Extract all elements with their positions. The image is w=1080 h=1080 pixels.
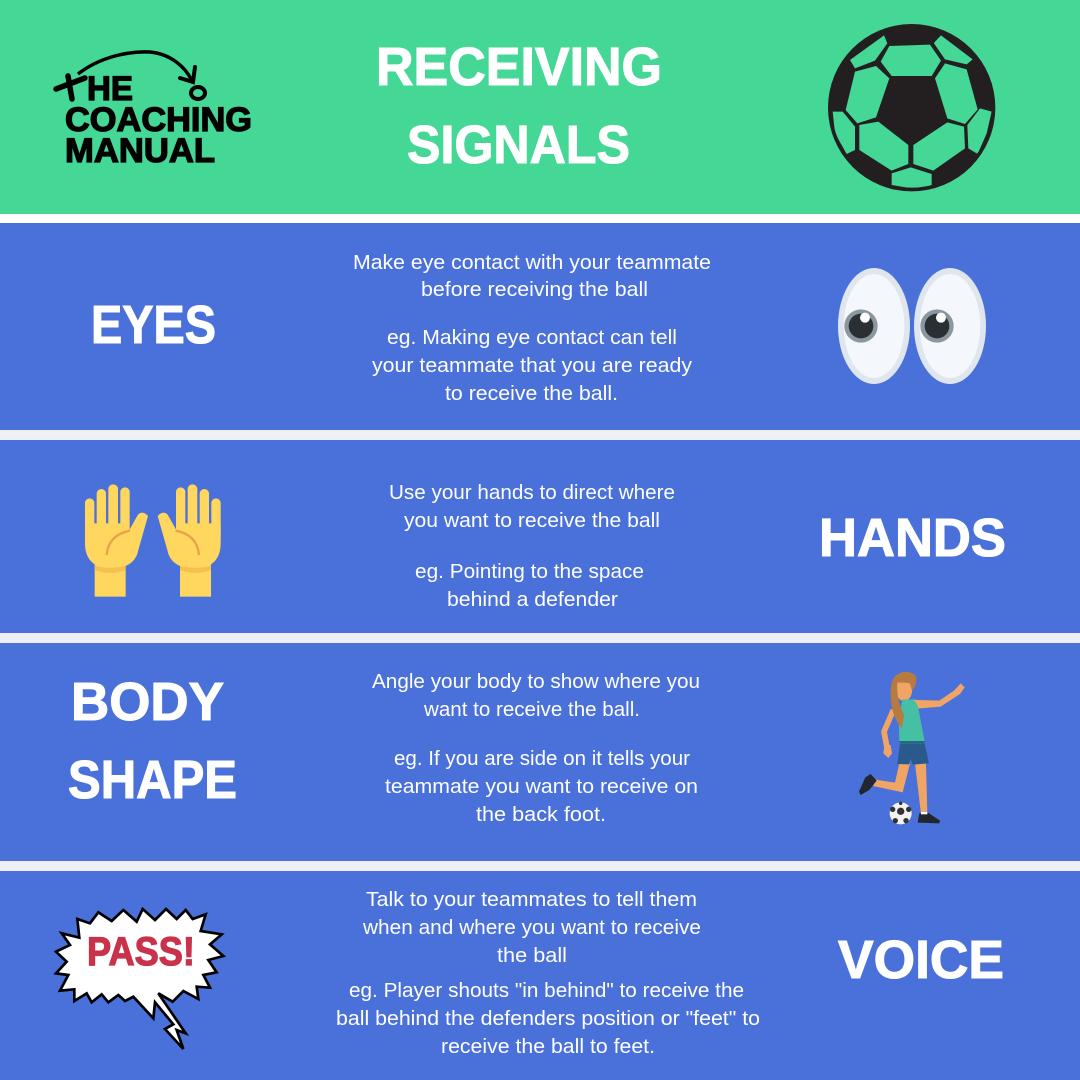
panel: voice <box>0 871 1080 1080</box>
text: hands description <box>389 481 675 611</box>
text: eyes description: before receiving the ball <box>421 278 648 301</box>
text: voice description: ball behind the defenders position or "feet" to <box>336 1007 760 1030</box>
text: body shape description <box>372 670 700 826</box>
icon: pass speech bubble: PASS! <box>87 930 195 974</box>
text: eyes description: your teammate that you are ready <box>372 354 693 377</box>
heading: body shape: BODY <box>71 672 224 732</box>
heading: hands: HANDS <box>819 508 1006 568</box>
text: hands description: eg. Pointing to the space <box>415 560 644 583</box>
icon: player kicking ball <box>859 672 965 824</box>
text: voice description <box>336 888 760 1058</box>
logo: The Coaching Manual: MANUAL <box>65 132 215 170</box>
title <box>376 37 662 175</box>
icon: raised hands <box>85 484 221 597</box>
heading: eyes: EYES <box>91 295 216 355</box>
panel: body shape <box>0 643 1080 861</box>
text: voice description: eg. Player shouts "in behind" to receive the <box>349 979 744 1002</box>
logo: The Coaching Manual: HE <box>87 70 133 108</box>
title: RECEIVING <box>376 37 662 97</box>
text: voice description: Talk to your teammates to tell them <box>366 888 697 911</box>
panel: header <box>0 0 1080 214</box>
text: voice description: receive the ball to feet. <box>441 1035 655 1058</box>
logo: The Coaching Manual: COACHING <box>65 101 252 139</box>
logo: The Coaching Manual <box>56 52 252 170</box>
text: body shape description: Angle your body to show where you <box>372 670 700 693</box>
text: voice description: the ball <box>497 944 567 967</box>
heading: body shape <box>68 672 237 810</box>
icon: football <box>828 24 995 191</box>
text: body shape description: teammate you want to receive on <box>385 775 698 798</box>
text: hands description: you want to receive the ball <box>404 509 660 532</box>
text: hands description: behind a defender <box>447 588 618 611</box>
panel: hands <box>0 440 1080 633</box>
heading: voice: VOICE <box>838 930 1004 990</box>
text: hands description: Use your hands to direct where <box>389 481 675 504</box>
icon: eyes <box>838 268 986 384</box>
text: eyes description <box>353 251 711 405</box>
heading: body shape: SHAPE <box>68 750 237 810</box>
text: body shape description: the back foot. <box>476 803 606 826</box>
text: eyes description: Make eye contact with your teammate <box>353 251 711 274</box>
text: body shape description: want to receive the ball. <box>423 698 640 721</box>
text: body shape description: eg. If you are side on it tells your <box>394 747 690 770</box>
text: eyes description: eg. Making eye contact can tell <box>387 326 677 349</box>
title: SIGNALS <box>407 115 630 175</box>
text: voice description: when and where you want to receive <box>362 916 701 939</box>
panel: eyes <box>0 223 1080 430</box>
text: eyes description: to receive the ball. <box>445 382 618 405</box>
icon: pass speech bubble <box>56 909 223 1049</box>
